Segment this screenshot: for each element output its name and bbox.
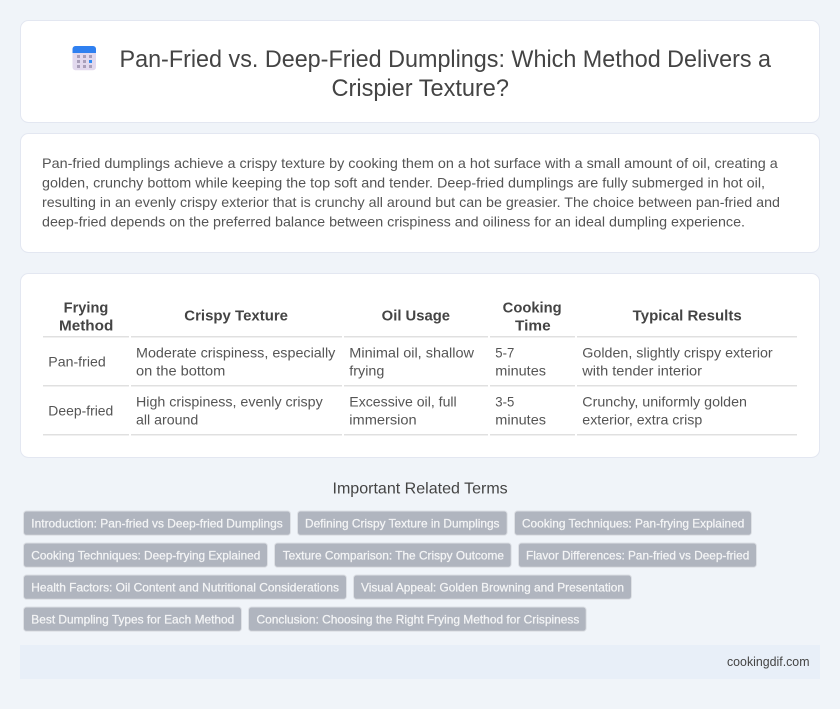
tag xyxy=(298,511,507,535)
table row: deep-fried xyxy=(43,394,797,436)
title xyxy=(120,46,772,102)
table row: pan-fried: minutes xyxy=(495,363,546,379)
related terms tags xyxy=(24,511,756,631)
table row: deep-fried: all around xyxy=(136,412,198,428)
table row: pan-fried: 5-7 xyxy=(495,345,515,361)
tag xyxy=(274,543,511,567)
icon: calendar xyxy=(72,46,96,70)
table row: deep-fried: 3-5 xyxy=(495,394,515,410)
table row: deep-fried: Excessive oil, full xyxy=(349,394,457,410)
tag xyxy=(518,543,756,567)
table row: pan-fried: with tender interior xyxy=(581,363,702,379)
tag xyxy=(354,575,632,599)
tag xyxy=(24,575,346,599)
tag: Cooking Techniques: Deep-frying Explained xyxy=(31,548,260,562)
table row: deep-fried: immersion xyxy=(349,412,417,428)
tag xyxy=(248,607,586,631)
tag: Health Factors: Oil Content and Nutritional Considerations xyxy=(31,580,339,594)
table row: pan-fried xyxy=(43,345,797,386)
table row: deep-fried: exterior, extra crisp xyxy=(582,412,703,428)
table header row: Cooking xyxy=(503,300,562,316)
table header row: Crispy Texture xyxy=(184,309,288,325)
table row: pan-fried: Golden, slightly crispy exterior xyxy=(582,345,773,361)
tag xyxy=(24,607,242,631)
intro paragraph: golden, crunchy bottom while keeping the top soft and tender. Deep-fried dumplings are fully submerged in hot oil, xyxy=(42,174,765,190)
tag xyxy=(24,511,290,535)
intro paragraph: resulting in an evenly crispy exterior that is crunchy all around but can be greasier. The choice between pan-fried and xyxy=(42,194,780,210)
tag: Conclusion: Choosing the Right Frying Method for Crispiness xyxy=(256,612,579,626)
table row: deep-fried: Deep-fried xyxy=(48,403,113,419)
header panel xyxy=(20,20,820,122)
table row: pan-fried: on the bottom xyxy=(136,363,225,379)
footer bar xyxy=(20,645,820,679)
table row: deep-fried: Crunchy, uniformly golden xyxy=(582,394,747,410)
intro paragraph xyxy=(42,155,780,230)
title: Crispier Texture? xyxy=(332,75,509,102)
related terms heading: Important Related Terms xyxy=(332,480,508,497)
table row: deep-fried: High crispiness, evenly crispy xyxy=(136,394,323,410)
table row: pan-fried: frying xyxy=(349,363,384,379)
panel: introduction text xyxy=(20,134,820,252)
title: Pan-Fried vs. Deep-Fried Dumplings: Which Method Delivers a xyxy=(120,46,772,73)
table row: pan-fried: Moderate crispiness, especially xyxy=(136,345,335,361)
table row: deep-fried: minutes xyxy=(495,412,546,428)
table header row: Time xyxy=(515,319,551,335)
table header row xyxy=(43,300,797,338)
table row: pan-fried: Pan-fried xyxy=(48,354,106,370)
panel: comparison table xyxy=(20,274,820,458)
table row: pan-fried: Minimal oil, shallow xyxy=(349,345,475,361)
table header row: Frying xyxy=(64,300,108,316)
tag: Flavor Differences: Pan-fried vs Deep-fried xyxy=(526,548,749,562)
table header row: Oil Usage xyxy=(382,309,450,325)
tag: Best Dumpling Types for Each Method xyxy=(31,612,234,626)
tag: Introduction: Pan-fried vs Deep-fried Dumplings xyxy=(31,516,283,530)
table header row: Typical Results xyxy=(633,309,742,325)
tag: Texture Comparison: The Crispy Outcome xyxy=(283,548,504,562)
intro paragraph: Pan-fried dumplings achieve a crispy texture by cooking them on a hot surface with a small amount of oil, creating a xyxy=(42,155,778,171)
table header row: Method xyxy=(59,319,113,335)
tag: Defining Crispy Texture in Dumplings xyxy=(305,516,500,530)
tag: Cooking Techniques: Pan-frying Explained xyxy=(522,516,744,530)
tag: Visual Appeal: Golden Browning and Presentation xyxy=(361,580,624,594)
tag xyxy=(24,543,268,567)
intro paragraph: deep-fried depends on the preferred balance between crispiness and oiliness for an ideal dumpling experience. xyxy=(42,214,745,230)
tag xyxy=(514,511,752,535)
footer source: cookingdif.com xyxy=(727,654,810,669)
